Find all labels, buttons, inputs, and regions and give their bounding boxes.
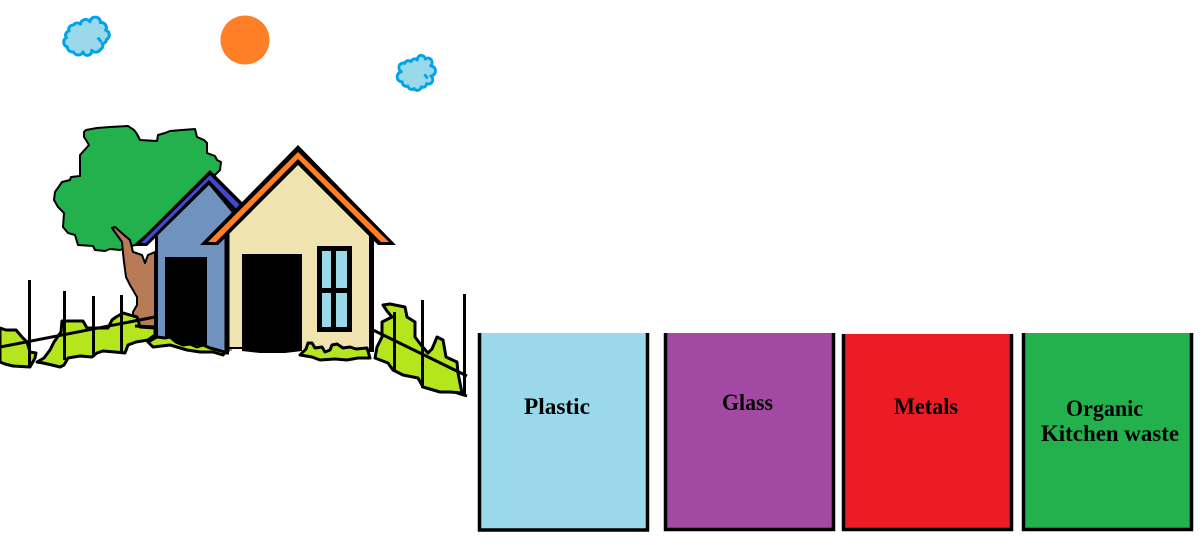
left bushes	[0, 313, 225, 367]
right fence	[373, 294, 467, 396]
blue house door	[165, 257, 207, 345]
icon: left cloud	[64, 17, 109, 55]
blue house	[134, 170, 262, 351]
bin: organic kitchen waste: Kitchen waste	[1041, 421, 1179, 446]
blue house roof	[134, 170, 262, 246]
bin: organic kitchen waste	[1024, 333, 1192, 530]
bush under cream house	[300, 343, 370, 360]
bin: plastic: Plastic	[524, 394, 590, 419]
bin: metals: Metals	[894, 394, 958, 419]
right bush	[375, 304, 462, 393]
bin: plastic	[480, 333, 648, 530]
bin: glass: Glass	[722, 390, 773, 415]
cream house window	[317, 246, 352, 332]
cream house roof	[200, 145, 396, 245]
bin: organic kitchen waste: Organic	[1066, 396, 1143, 421]
cream house wall	[229, 165, 370, 349]
cream house	[200, 145, 396, 353]
blue house wall	[157, 184, 232, 351]
icon: right cloud	[397, 55, 435, 90]
left fence	[0, 280, 155, 368]
tree	[54, 126, 221, 330]
icon: sun	[220, 16, 270, 64]
cream house door	[242, 254, 302, 353]
bin: metals	[844, 334, 1012, 530]
tree trunk	[112, 227, 155, 330]
tree canopy	[54, 126, 221, 251]
bin: glass	[666, 333, 834, 530]
